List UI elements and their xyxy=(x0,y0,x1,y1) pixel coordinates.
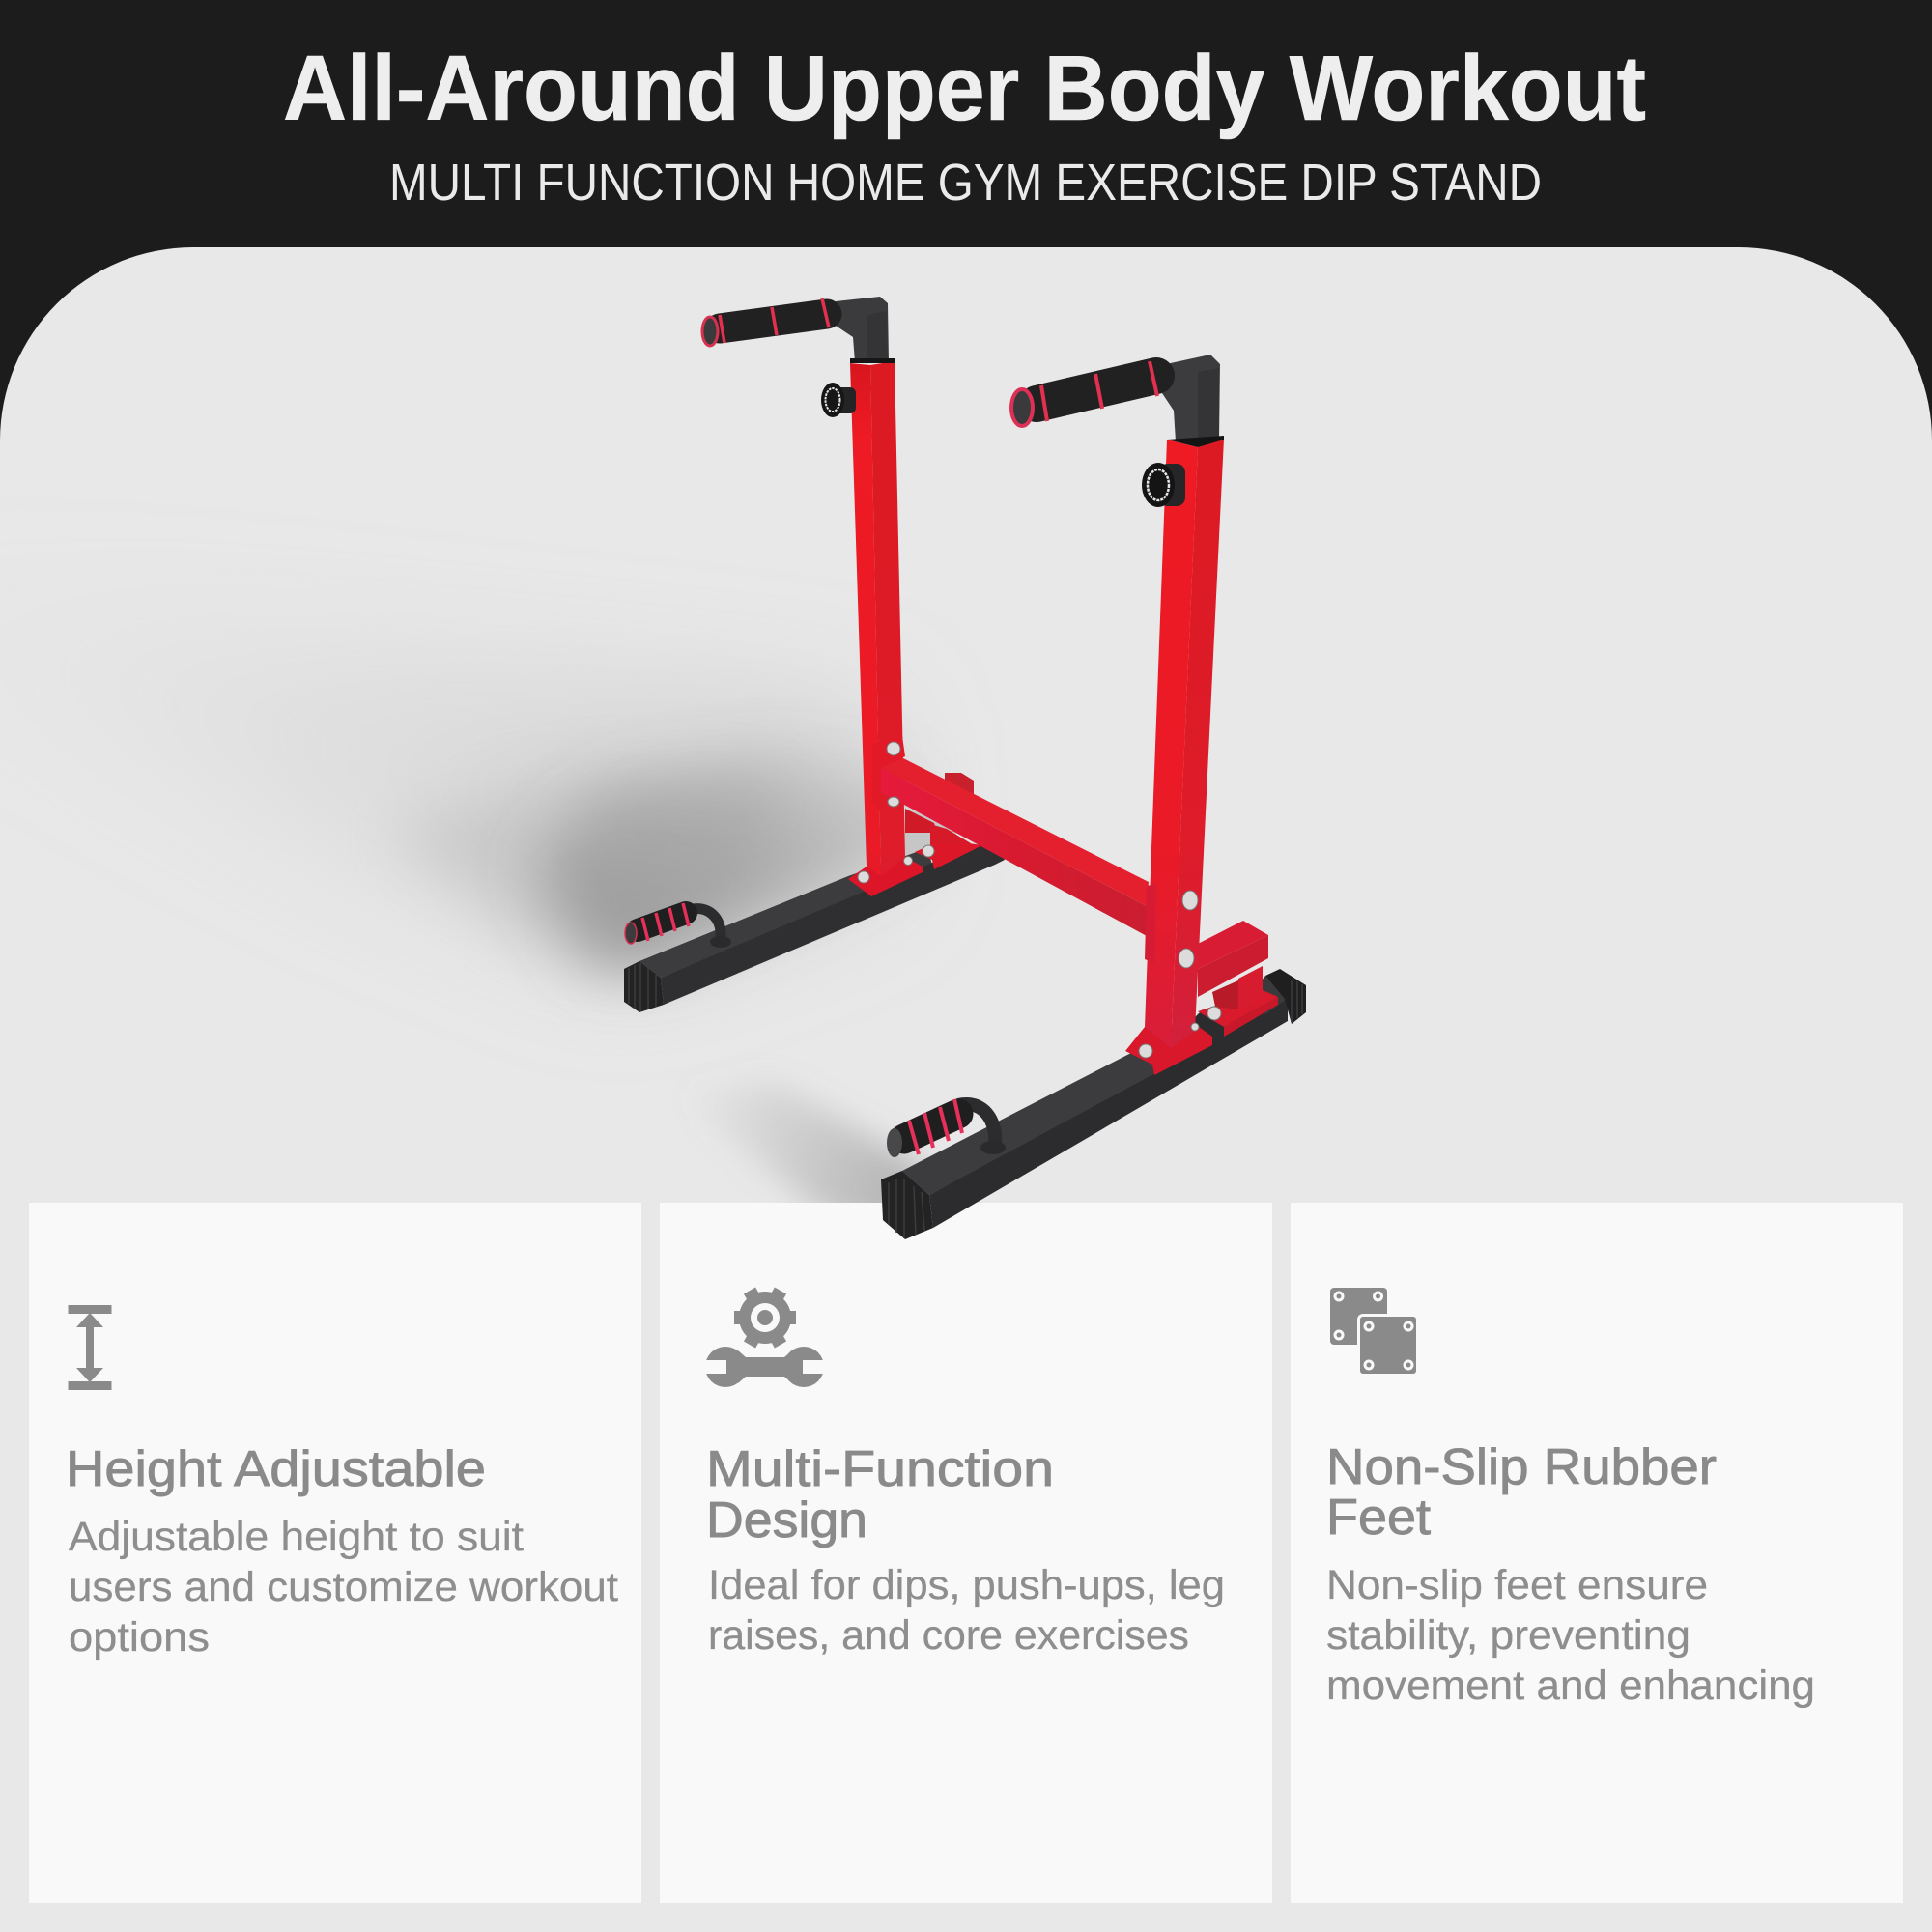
right rear block xyxy=(1198,921,1278,1037)
heading: height adjustable: Height Adjustable xyxy=(66,1441,486,1497)
icon: height arrows xyxy=(68,1305,112,1390)
heading: multi-function design xyxy=(706,1441,1054,1548)
left base bar xyxy=(624,838,1005,1012)
text: multi-function description: raises, and core exercises xyxy=(708,1612,1189,1659)
left elbow and grip xyxy=(702,297,895,363)
text: non-slip description: Non-slip feet ensure xyxy=(1326,1562,1708,1608)
text: height adjustable description xyxy=(69,1514,618,1661)
right base bar xyxy=(881,969,1306,1239)
heading: multi-function design: Multi-Function xyxy=(706,1441,1054,1497)
shadow: soft floor shadows xyxy=(0,580,956,1236)
left push-up handle xyxy=(625,903,731,948)
right push-up handle xyxy=(887,1099,1006,1157)
icon: rubber feet plates xyxy=(1330,1288,1419,1376)
right upright xyxy=(1145,439,1224,1048)
crossbar xyxy=(881,758,1149,936)
product: dip stand xyxy=(624,297,1306,1239)
title: All-Around Upper Body Workout xyxy=(283,37,1646,140)
left knob xyxy=(821,383,856,417)
text: height adjustable description: Adjustable height to suit xyxy=(69,1514,524,1560)
left front foot plate xyxy=(848,857,923,896)
right knob xyxy=(1142,463,1185,507)
text: multi-function description: Ideal for dips, push-ups, leg xyxy=(708,1562,1225,1608)
left rear plate and legs xyxy=(905,773,982,869)
text: non-slip description: stability, preventing xyxy=(1326,1612,1690,1659)
bolts xyxy=(858,742,1221,1058)
text: height adjustable description: users and customize workout xyxy=(69,1564,618,1610)
right front foot plate xyxy=(1125,1024,1212,1075)
icon: gear and wrench xyxy=(703,1291,827,1387)
subtitle: MULTI FUNCTION HOME GYM EXERCISE DIP STAND xyxy=(389,154,1542,212)
text: non-slip description: movement and enhancing xyxy=(1326,1662,1815,1709)
heading: multi-function design: Design xyxy=(706,1492,867,1548)
left upright xyxy=(850,361,905,876)
right elbow and grip xyxy=(1011,355,1224,447)
text: height adjustable description: options xyxy=(69,1614,210,1661)
text: non-slip description xyxy=(1326,1562,1815,1709)
heading: non-slip rubber feet: Feet xyxy=(1326,1490,1432,1546)
text: multi-function description xyxy=(708,1562,1225,1659)
heading: non-slip rubber feet: Non-Slip Rubber xyxy=(1326,1439,1717,1495)
panel: feature card backgrounds xyxy=(29,1203,1903,1903)
heading: non-slip rubber feet xyxy=(1326,1439,1717,1546)
